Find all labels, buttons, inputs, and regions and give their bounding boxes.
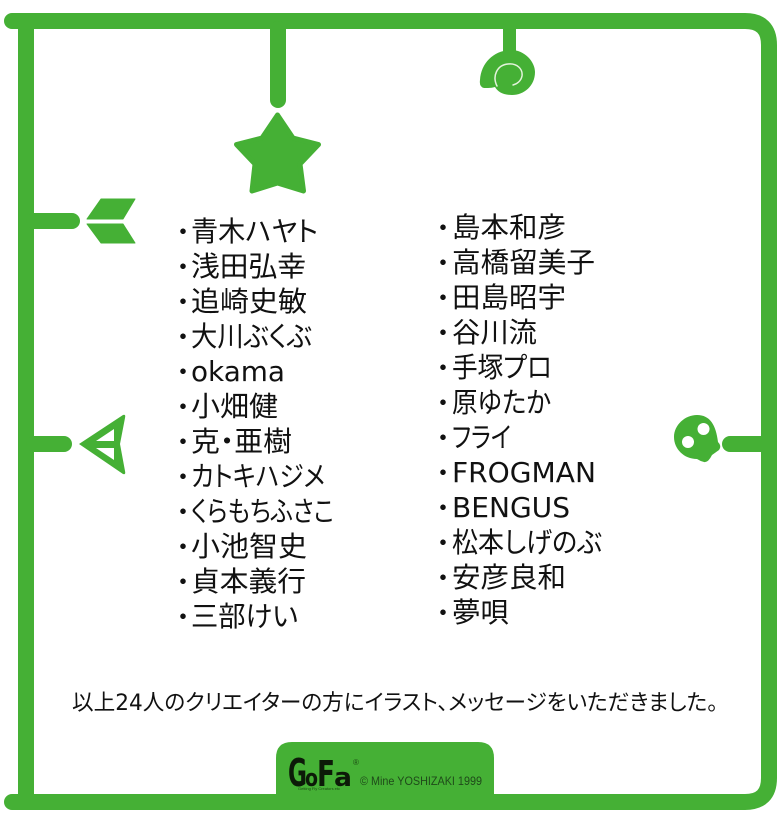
list: creators right column: ・ [430, 243, 456, 280]
list: creators right column: ・ [430, 383, 456, 420]
list: creators right column: ・ [430, 348, 456, 385]
list: creators left column: ・ [170, 212, 196, 249]
list: creators left column: 追崎史敏 [191, 285, 307, 318]
list: creators right column: フライ [452, 421, 511, 454]
logo: GoFa [288, 751, 359, 795]
list: creators left column: 克・亜樹 [191, 425, 292, 458]
logo: GoFa: a [334, 763, 352, 793]
logo: GoFa: ® [353, 758, 359, 767]
list: creators left column: ・ [170, 527, 196, 564]
icon: triangle on stub [34, 415, 125, 474]
icon: spiral on stem [480, 29, 535, 95]
list: creators left column: ・ [170, 422, 196, 459]
list: creators right column: ・ [430, 593, 456, 630]
tab: logo and copyright [276, 742, 494, 796]
list: creators right column: 谷川流 [452, 316, 537, 349]
list: creators right column: ・ [430, 208, 456, 245]
list: creators right column: 島本和彦 [452, 211, 566, 244]
list: creators left column: ・ [170, 317, 196, 354]
copyright: © Mine YOSHIZAKI 1999 [360, 774, 482, 788]
logo: GoFa: o [305, 764, 318, 792]
logo: GoFa: Getting Fly Creators etc [298, 786, 340, 791]
icon: arrow fletching on stub [34, 199, 135, 243]
logo: GoFa: F [317, 754, 335, 795]
list: creators right column: ・ [430, 523, 456, 560]
logo: GoFa: G [288, 751, 307, 795]
list: creators left column: 青木ハヤト [191, 215, 318, 248]
list: creators right column: ・ [430, 453, 456, 490]
list: creators left column: 貞本義行 [191, 565, 306, 598]
list: creators right column: ・ [430, 558, 456, 595]
icon: skull on stub [674, 415, 769, 462]
list: creators right column: 原ゆたか [452, 386, 551, 419]
list: creators right column: 安彦良和 [452, 561, 566, 594]
list: creators left column: 大川ぶくぶ [191, 320, 312, 353]
list: creators left column: ・ [170, 387, 196, 424]
list: creators right column: ・ [430, 488, 456, 525]
list: creators left column: カトキハジメ [191, 460, 325, 493]
icon: star on stem [236, 29, 318, 191]
list: creators left column: ・ [170, 352, 196, 389]
list: creators right column: ・ [430, 313, 456, 350]
list: creators right column [430, 208, 602, 630]
list: creators left column: 小池智史 [191, 530, 307, 563]
list: creators left column: ・ [170, 282, 196, 319]
list: creators right column: ・ [430, 418, 456, 455]
list: creators right column: 夢唄 [452, 596, 509, 629]
list: creators right column: ・ [430, 278, 456, 315]
list: creators left column: okama [191, 355, 285, 388]
list: creators right column: 高橋留美子 [452, 246, 595, 279]
list: creators left column: ・ [170, 492, 196, 529]
list: creators left column: 小畑健 [191, 390, 278, 423]
list: creators left column: ・ [170, 457, 196, 494]
list: creators right column: 手塚プロ [452, 351, 552, 384]
list: creators right column: BENGUS [452, 491, 570, 524]
list: creators left column: 三部けい [191, 600, 298, 633]
list: creators left column [170, 212, 334, 634]
list: creators left column: ・ [170, 562, 196, 599]
list: creators right column: FROGMAN [452, 456, 596, 489]
list: creators right column: 松本しげのぶ [452, 526, 602, 559]
list: creators left column: 浅田弘幸 [191, 250, 306, 283]
list: creators right column: 田島昭宇 [452, 281, 566, 314]
list: creators left column: くらもちふさこ [191, 495, 334, 528]
list: creators left column: ・ [170, 247, 196, 284]
list: creators left column: ・ [170, 597, 196, 634]
caption: 以上24人のクリエイターの方にイラスト、メッセージをいただきました。 [72, 691, 718, 716]
